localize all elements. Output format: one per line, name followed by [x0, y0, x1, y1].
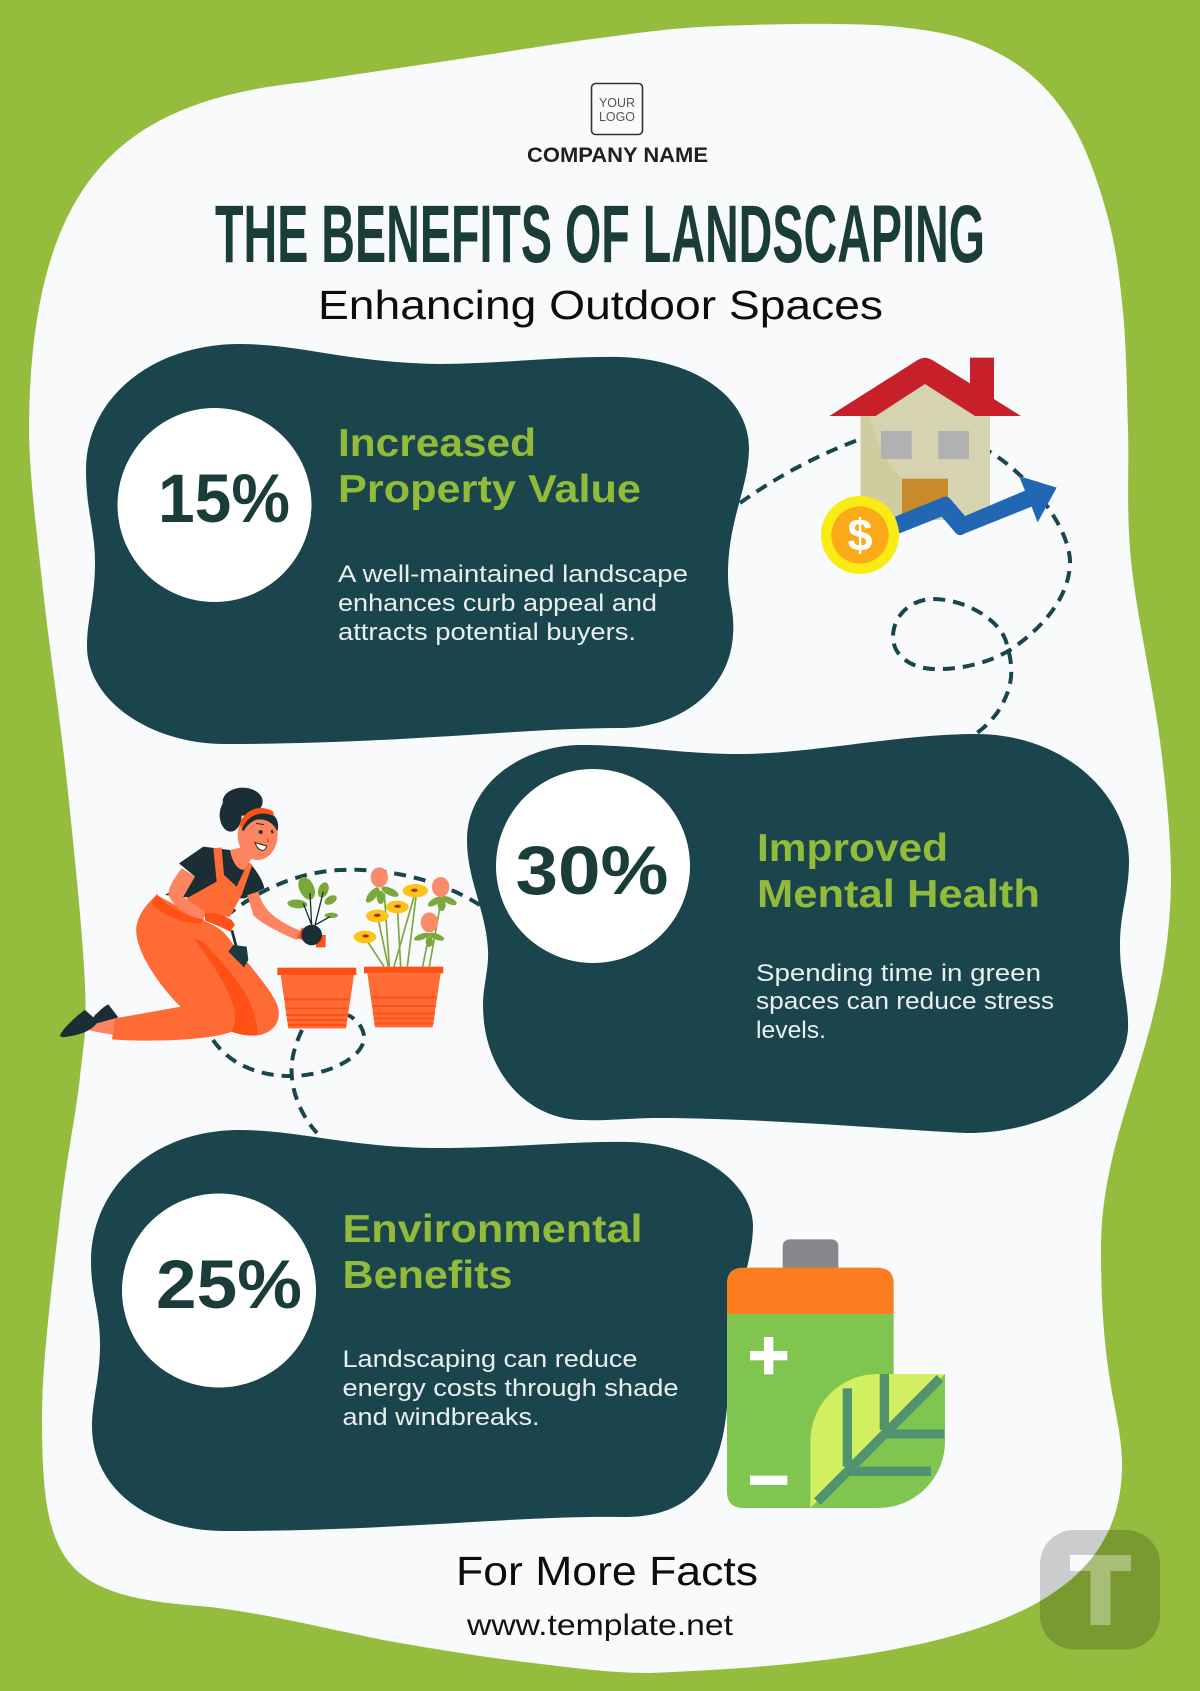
body text	[756, 960, 1054, 1044]
footer call to action: For More Facts	[456, 1548, 758, 1594]
heading: Increased	[338, 422, 536, 465]
company name: COMPANY NAME	[527, 144, 708, 167]
stat circle 25%	[122, 1194, 316, 1388]
stat circle 15%	[118, 408, 312, 602]
watermark logo	[1040, 1530, 1160, 1650]
body text: A well-maintained landscape	[338, 561, 688, 588]
body text: and windbreaks.	[342, 1404, 540, 1431]
heading: Improved	[757, 827, 948, 870]
icon: house with rising arrow and coin	[821, 358, 1057, 574]
illustration: gardener with plants and pots	[60, 788, 458, 1041]
stat circle 15%: 15%	[158, 460, 290, 537]
panel: environmental benefits	[91, 1130, 753, 1531]
footer website: www.template.net	[466, 1609, 734, 1642]
heading: Property Value	[338, 468, 641, 511]
gardener figure	[60, 788, 300, 1041]
body text: enhances curb appeal and	[338, 590, 657, 617]
dashed connector: gardener path	[213, 870, 480, 1133]
logo placeholder: YOUR	[599, 96, 635, 110]
subtitle: Enhancing Outdoor Spaces	[318, 282, 883, 328]
stat circle 25%: 25%	[156, 1246, 302, 1323]
potted flowers	[354, 867, 458, 1027]
logo placeholder: LOGO	[599, 110, 635, 124]
body text: Spending time in green	[756, 960, 1041, 987]
panel: increased property value	[86, 344, 749, 744]
potted seedling	[277, 874, 356, 1028]
body text: attracts potential buyers.	[338, 619, 636, 646]
heading	[342, 1208, 642, 1297]
stat circle 30%	[496, 769, 690, 963]
heading: Benefits	[342, 1254, 512, 1297]
body text: Landscaping can reduce	[342, 1346, 638, 1373]
body text: energy costs through shade	[342, 1375, 678, 1402]
icon: battery with leaf	[727, 1239, 945, 1508]
body text	[342, 1346, 678, 1431]
logo placeholder	[592, 84, 642, 134]
body text: levels.	[756, 1017, 826, 1044]
heading	[338, 422, 641, 511]
dashed connector: house path	[740, 431, 1070, 733]
stat circle 30%: 30%	[516, 832, 668, 909]
icon: house with rising arrow and coin: $	[847, 510, 873, 561]
heading: Environmental	[342, 1208, 642, 1251]
body text	[338, 561, 688, 646]
panel: improved mental health	[467, 734, 1129, 1133]
heading	[757, 827, 1040, 916]
body text: spaces can reduce stress	[756, 988, 1054, 1015]
heading: Mental Health	[757, 873, 1040, 916]
